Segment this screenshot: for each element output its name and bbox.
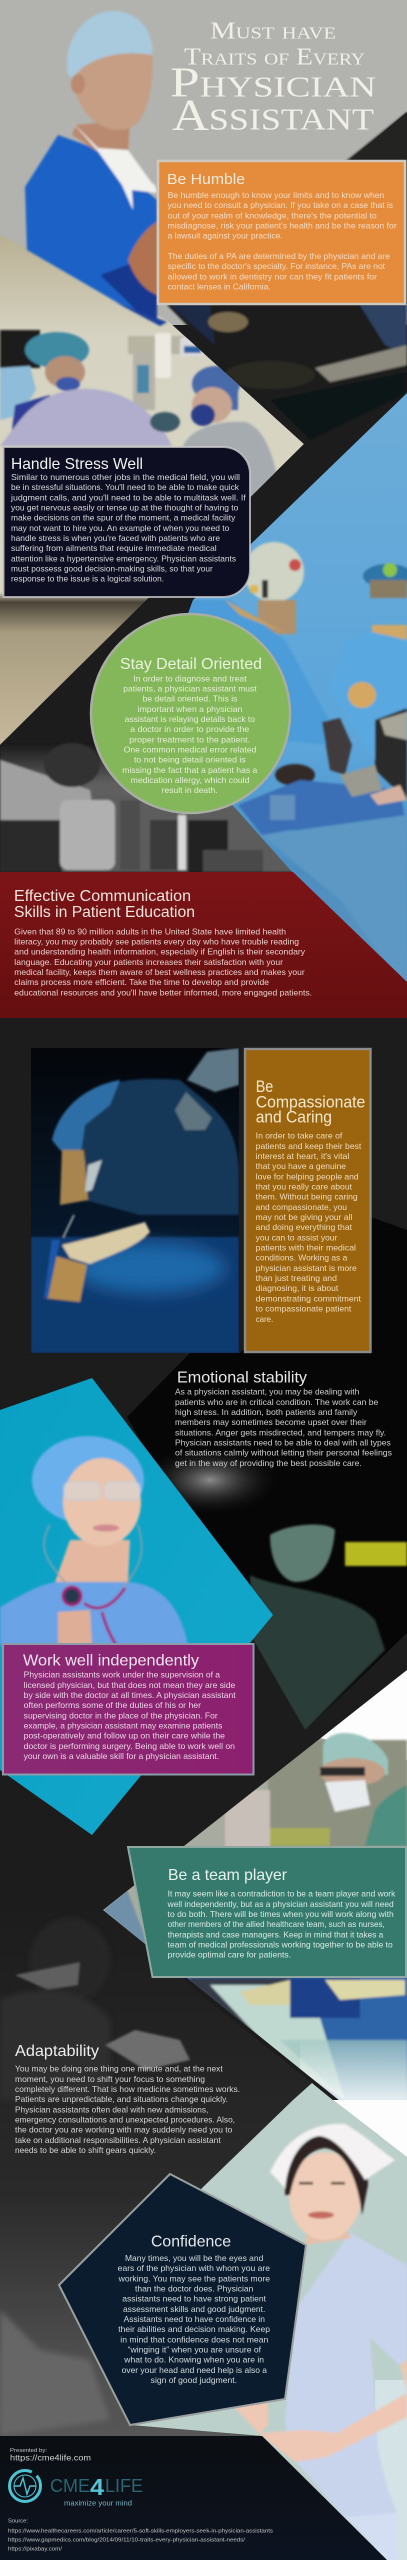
text: stay detail body: assistant is relaying details back to: [125, 714, 255, 724]
text: compassionate body: and doing everything that: [256, 1222, 353, 1232]
photo: nurse with stethoscope: [0, 1370, 280, 1840]
panel: work well independently: [3, 1644, 254, 1774]
text: stay detail body: important when a physician: [138, 704, 243, 714]
text: be humble body: you need to consult a physician. If you take on a case that is: [168, 200, 393, 210]
stethoscope: [44, 1525, 142, 1645]
text: confidence body: sign of good judgment.: [151, 2375, 237, 2385]
text: effective communication body: [14, 926, 312, 997]
text: compassionate body: conditions. Working as a: [256, 1253, 348, 1263]
logo wordmark: CME: [50, 2476, 90, 2496]
title: Physician: [170, 61, 376, 107]
text: compassionate body: love for helping people and: [256, 1171, 359, 1181]
text: effective communication body: and understanding health information, especially if English is their secondary: [14, 947, 306, 957]
panel: be compassionate and caring: [245, 1049, 370, 1352]
panel: be humble: [158, 161, 405, 304]
logo wordmark: maximize your mind: [64, 2501, 132, 2508]
neck: [72, 120, 130, 155]
text: effective communication body: Given that 89 to 90 million adults in the United State have limited health: [14, 926, 286, 936]
text: confidence body: assistants need to have strong patient: [122, 2294, 267, 2304]
text: stay detail body: medication allergy, which could: [131, 775, 250, 785]
uniform skirt: [345, 2513, 398, 2560]
icon: cme4life logo: [10, 2470, 40, 2502]
neck: [305, 2230, 352, 2245]
text: team player body: provide optimal care for patients.: [168, 1950, 291, 1960]
text: be humble body: misdiagnose, risk your patient's health and be the reason for: [168, 220, 397, 230]
text: adaptability body: Physician assistants often deal with new admissions,: [15, 2104, 208, 2114]
sources: https://pixabay.com/: [8, 2546, 63, 2552]
text: handle stress body: make decisions on the spur of the moment, a medical facility: [11, 513, 236, 523]
text: handle stress body: be in stressful situations. You'll need to be able to make quick: [11, 482, 240, 492]
text: adaptability body: needs to be able to shift gears quickly.: [15, 2145, 156, 2155]
text: stay detail body: proper treatment to the patient.: [129, 734, 250, 744]
text: confidence body: assessment skills and good judgment.: [123, 2304, 265, 2314]
title: [170, 18, 376, 139]
text: work independently body: example, a physician assistant may examine patients: [24, 1720, 222, 1730]
text: handle stress body: suffering from ailments that require immediate medical: [11, 543, 217, 553]
text: be humble body: out of your realm of knowledge, there's the potential to: [168, 210, 377, 220]
text: emotional stability body: situations. Anger gets misdirected, and tempers may fly.: [175, 1427, 386, 1437]
text: emotional stability body: get in the way of providing the best possible care.: [175, 1458, 362, 1468]
text: compassionate body: diagnosing, it is about: [256, 1283, 339, 1293]
text: stay detail body: a doctor in order to provide the: [130, 724, 250, 734]
surgeon with green cap: [346, 562, 407, 761]
uniform top: [285, 2233, 407, 2517]
logo wordmark: [50, 2474, 143, 2508]
text: effective communication body: literacy, you may probably see patients every day who have trouble reading: [14, 936, 299, 946]
nurse cap: [270, 2124, 395, 2188]
heading: effective communication: [14, 888, 195, 921]
text: be humble body: a lawsuit against your practice.: [168, 231, 283, 241]
instrument trays: [238, 708, 407, 835]
text: compassionate body: patients and keep their best: [256, 1141, 362, 1151]
text: team player body: [167, 1889, 396, 1960]
heading: effective communication: Skills in Patient Education: [14, 904, 195, 921]
mask: [72, 122, 157, 210]
text: work independently body: your own is a valuable skill for a physician assistant.: [24, 1751, 219, 1761]
logo wordmark: 4: [90, 2474, 104, 2500]
text: emotional stability body: patients who are in critical condition. The work can be: [175, 1397, 379, 1407]
lips: [93, 1524, 119, 1532]
panel: effective communication: [0, 872, 407, 1018]
gloved hands: [275, 718, 352, 786]
lower photo area: [188, 1978, 407, 2100]
text: confidence body: over your head and need help is also a: [122, 2365, 267, 2375]
text: handle stress body: must possess good decision-making skills, so that your: [11, 564, 213, 574]
text: adaptability body: Patients are unpredictable, and situations change quickly.: [15, 2094, 228, 2104]
photo: adaptability background: [0, 1900, 312, 2436]
text: confidence body: “winging it” when you are unsure of: [128, 2344, 262, 2354]
text: emotional stability body: [175, 1387, 392, 1468]
text: adaptability body: take on additional responsibilities. A physician assistant: [15, 2135, 221, 2145]
surgeon with loupes: [319, 1733, 407, 1846]
title: Must have: [210, 18, 336, 44]
heading: handle stress well: Handle Stress Well: [11, 456, 143, 473]
presented by: Presented by:: [10, 2448, 48, 2454]
text: team player body: team of medical professionals working together to be able to: [168, 1940, 393, 1950]
syringe: [85, 1160, 102, 1192]
heading: effective communication: Effective Communication: [14, 888, 191, 905]
heading: be compassionate and caring: Be: [256, 1077, 273, 1096]
glasses: [64, 1482, 140, 1500]
heading: be humble: Be Humble: [167, 171, 245, 188]
text: compassionate body: may not be giving your all: [256, 1212, 352, 1222]
text: confidence body: than the doctor does. Physician: [135, 2284, 254, 2294]
text: effective communication body: educational resources and you'll have better informed, more engaged patients.: [14, 987, 312, 997]
text: be humble body: allowed to work in dentistry nor can they fit patients for: [168, 271, 377, 281]
text: work independently body: by side with the doctor at all times. A physician assistant: [24, 1690, 236, 1700]
sources: [8, 2519, 274, 2552]
photo: surgeon with syringe: [31, 1048, 239, 1353]
text: confidence body: what to do. Knowing when you are in: [123, 2355, 264, 2365]
scrubs: [0, 1582, 188, 1645]
text: stay detail body: to not being detail oriented is: [134, 755, 246, 765]
text: stay detail body: result in death.: [162, 785, 218, 795]
text: be humble body: [168, 190, 397, 292]
text: handle stress body: you get nervous easily or tense up at the thought of having to: [11, 502, 239, 512]
text: handle stress body: Similar to numerous other jobs in the medical field, you will: [11, 472, 240, 482]
text: handle stress body: response to the issue is a logical solution.: [11, 574, 164, 584]
panel: stay detail oriented: [91, 614, 290, 813]
text: team player body: therapists and case managers. Keep in mind that it takes a: [168, 1929, 384, 1939]
heading: be compassionate and caring: and Caring: [256, 1108, 332, 1127]
heading: stay detail oriented: Stay Detail Oriented: [120, 656, 262, 673]
photo: blue surgical team: [188, 393, 407, 982]
text: adaptability body: You may be doing one thing one minute and, at the next: [15, 2064, 223, 2074]
text: work independently body: often performs some of the duties of his or her: [24, 1700, 201, 1710]
text: confidence body: working. You may see the patients more: [118, 2273, 270, 2283]
panel: confidence: [59, 2174, 306, 2425]
text: compassionate body: In order to take care of: [256, 1131, 343, 1141]
gown: [80, 1078, 239, 1216]
glove: [62, 1222, 150, 1264]
title: Assistant: [172, 90, 374, 139]
arm: [128, 222, 157, 295]
heading: confidence: Confidence: [151, 2234, 231, 2251]
eyes: [299, 2182, 345, 2184]
photo: masked surgeon in the dark: [120, 1210, 407, 1740]
text: compassionate body: and compassionate, you: [256, 1202, 347, 1212]
text: handle stress body: attention like a hypertensive emergency. Physician assistants: [11, 553, 236, 563]
text: stay detail body: missing the fact that a patient has a: [122, 765, 258, 775]
iv bag and machines: [128, 333, 204, 410]
text: adaptability body: completely different. That is how medicine sometimes works.: [15, 2084, 240, 2094]
heading: be a team player: Be a team player: [168, 1867, 288, 1884]
text: effective communication body: claims process more efficient. Take the time to develop and provide: [14, 977, 269, 987]
panel: adaptability: [15, 2043, 240, 2155]
footer: [0, 2436, 387, 2560]
scrubs: [25, 135, 157, 323]
text: emotional stability body: members may sometimes become upset over their: [175, 1417, 367, 1427]
neck: [55, 1540, 130, 1582]
text: confidence body: in mind that confidence does not mean: [120, 2334, 269, 2344]
heading: adaptability: Adaptability: [15, 2043, 99, 2060]
text: be humble body: contact lenses in California.: [168, 282, 271, 292]
text: compassionate body: that you really care about: [256, 1182, 353, 1192]
surgeon left: [0, 332, 172, 446]
text: work independently body: post-operatively and follow up on their care while the: [24, 1731, 225, 1741]
text: confidence body: Assistants need to have confidence in: [124, 2314, 265, 2324]
title background: [0, 0, 407, 325]
text: confidence body: Many times, you will be the eyes and: [125, 2253, 264, 2263]
heading: be compassionate and caring: [256, 1077, 365, 1127]
photo: operating room diamond: [0, 235, 304, 745]
text: emotional stability body: Physician assistants need to be able to deal with all types: [175, 1438, 391, 1448]
text: be humble body: The duties of a PA are determined by the physician and are: [168, 251, 390, 261]
hand: [58, 1610, 92, 1645]
text: confidence body: their abilities and decision making. Keep: [118, 2324, 270, 2334]
panel: handle stress well: [4, 447, 250, 597]
text: work independently body: licensed physician, but that does not mean they are side: [24, 1680, 236, 1690]
panel: be a team player: [128, 1847, 406, 1977]
text: compassionate body: to compassionate patient: [256, 1304, 352, 1314]
arm and glove: [60, 1150, 88, 1205]
text: confidence body: [118, 2253, 270, 2385]
heading: work well independently: Work well independently: [23, 1653, 199, 1670]
sources: https://www.healthecareers.com/article/career/5-soft-skills-employers-seek-in-physician-assistants: [8, 2528, 274, 2534]
presented by: https://cme4life.com: [10, 2454, 91, 2463]
text: compassionate body: you can to assist your: [256, 1232, 338, 1242]
text: stay detail body: In order to diagnose and treat: [133, 673, 247, 683]
text: work independently body: Physician assistants work under the supervision of a: [24, 1670, 220, 1680]
text: emotional stability body: high stress. In addition, both patients and family: [175, 1407, 358, 1417]
text: team player body: to do both. There will be times when you will work along with: [168, 1909, 394, 1919]
text: adaptability body: emergency consultations and unexpected procedures. Also,: [15, 2114, 235, 2124]
face: [73, 50, 153, 130]
title: Traits of Every: [184, 44, 365, 70]
cap and mask: [187, 1048, 239, 1092]
heading: be compassionate and caring: Compassionate: [256, 1092, 365, 1111]
text: compassionate body: than just treating and: [256, 1273, 337, 1283]
text: adaptability body: the doctor you are working with may suddenly need you to: [15, 2125, 233, 2135]
logo wordmark: LIFE: [105, 2476, 143, 2496]
text: compassionate body: that you have a genuine: [256, 1161, 346, 1171]
face: [63, 1458, 141, 1546]
photo: dark surgery, top right: [167, 112, 407, 444]
sources: https://www.gapmedics.com/blog/2014/09/11/10-traits-every-physician-assistant-needs/: [8, 2538, 246, 2544]
text: compassionate body: interest at heart, it's vital: [256, 1151, 349, 1161]
hair: [285, 2135, 368, 2215]
text: handle stress body: [10, 472, 246, 584]
heading: emotional stability: Emotional stability: [177, 1369, 307, 1386]
presented by: [10, 2448, 91, 2463]
text: compassionate body: patients with their medical: [256, 1243, 356, 1253]
surgeon right: [149, 364, 277, 498]
text: confidence body: ears of the physician with whom you are: [118, 2263, 270, 2273]
photo: smiling nurse: [130, 2083, 407, 2560]
text: adaptability body: [15, 2064, 240, 2155]
cap: [67, 11, 152, 78]
text: compassionate body: physician assistant is more: [256, 1263, 357, 1273]
text: handle stress body: may not want to hire you. An example of when you need to: [11, 523, 230, 533]
text: compassionate body: them. Without being caring: [256, 1192, 358, 1202]
photo: surgical team: [100, 1665, 407, 2165]
text: emotional stability body: of situations calmly without letting their personal feelings: [175, 1448, 392, 1458]
incision patch: [44, 1255, 87, 1302]
text: effective communication body: medical facility, keeps them aware of best wellness practices and makes your: [14, 967, 305, 977]
text: stay detail body: [122, 673, 258, 795]
text: handle stress body: handle stress is when you're faced with patients who are: [11, 533, 220, 543]
text: effective communication body: language. Educating your patients increases their satisfaction with your: [14, 957, 283, 967]
sources: Source:: [8, 2519, 28, 2525]
text: team player body: It may seem like a contradiction to be a team player and work: [168, 1889, 396, 1899]
text: work independently body: doctor is performing surgery. Being able to work well on: [24, 1741, 235, 1751]
photo: black and white operating room: [0, 743, 293, 872]
text: be humble body: Be humble enough to know your limits and to know when: [168, 190, 385, 200]
hair cap: [32, 1436, 144, 1524]
smile: [308, 2212, 334, 2218]
text: handle stress body: judgment calls, and you'll need to be able to multitask well. If: [10, 492, 246, 502]
text: work independently body: supervising doctor in the place of the physician. For: [24, 1710, 218, 1720]
text: adaptability body: moment, you need to shift your focus to something: [15, 2074, 205, 2084]
face: [289, 2152, 361, 2240]
panel: emotional stability: [175, 1369, 392, 1468]
text: be humble body: specific to the doctor's specialty. For instance, PAs are not: [168, 261, 386, 271]
text: stay detail body: One common medical error related: [124, 744, 257, 754]
doctor illustration: [25, 11, 167, 326]
surgeon with patterned cap: [188, 540, 330, 746]
text: compassionate body: care.: [256, 1314, 273, 1324]
text: stay detail body: patients, a physician assistant must: [123, 684, 257, 694]
arm and hand: [232, 2393, 407, 2462]
text: team player body: other members of the allied healthcare team, such as nurses,: [168, 1919, 385, 1929]
text: compassionate body: demonstrating commitment: [256, 1293, 362, 1303]
text: work independently body: [24, 1670, 236, 1761]
text: compassionate body: [256, 1131, 362, 1324]
text: emotional stability body: As a physician assistant, you may be dealing with: [175, 1387, 360, 1397]
text: stay detail body: be detail oriented. This is: [143, 694, 237, 704]
corner triangle: [350, 112, 407, 160]
text: team player body: well independently, but as a physician assistant you will need: [167, 1899, 394, 1909]
drape: [31, 1237, 239, 1353]
